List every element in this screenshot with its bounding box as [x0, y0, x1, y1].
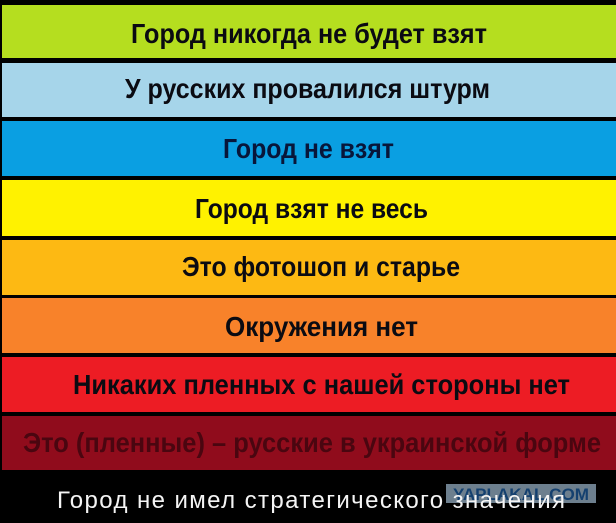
band 6: orange — [2, 298, 616, 353]
band 4: yellow: Город взят не весь — [195, 193, 428, 224]
band 2: light blue — [2, 63, 616, 117]
band 7: red: Никаких пленных с нашей стороны нет — [73, 369, 570, 400]
footer text: Город не имел стратегического значения — [57, 487, 565, 514]
band 5: amber — [2, 240, 616, 295]
band 1: lime: Город никогда не будет взят — [131, 18, 487, 49]
watermark: yaplakal: YAPLAKAL.COM — [453, 485, 589, 504]
band 3: blue: Город не взят — [223, 133, 394, 164]
band 7: red — [2, 357, 616, 412]
band 4: yellow — [2, 180, 616, 236]
band 1: lime — [2, 5, 616, 58]
band 5: amber: Это фотошоп и старье — [182, 251, 460, 282]
band 2: light blue: У русских провалился штурм — [125, 73, 490, 104]
band 6: orange: Окружения нет — [225, 311, 418, 342]
band 3: blue — [2, 121, 616, 176]
band 8: dark red — [2, 416, 616, 470]
